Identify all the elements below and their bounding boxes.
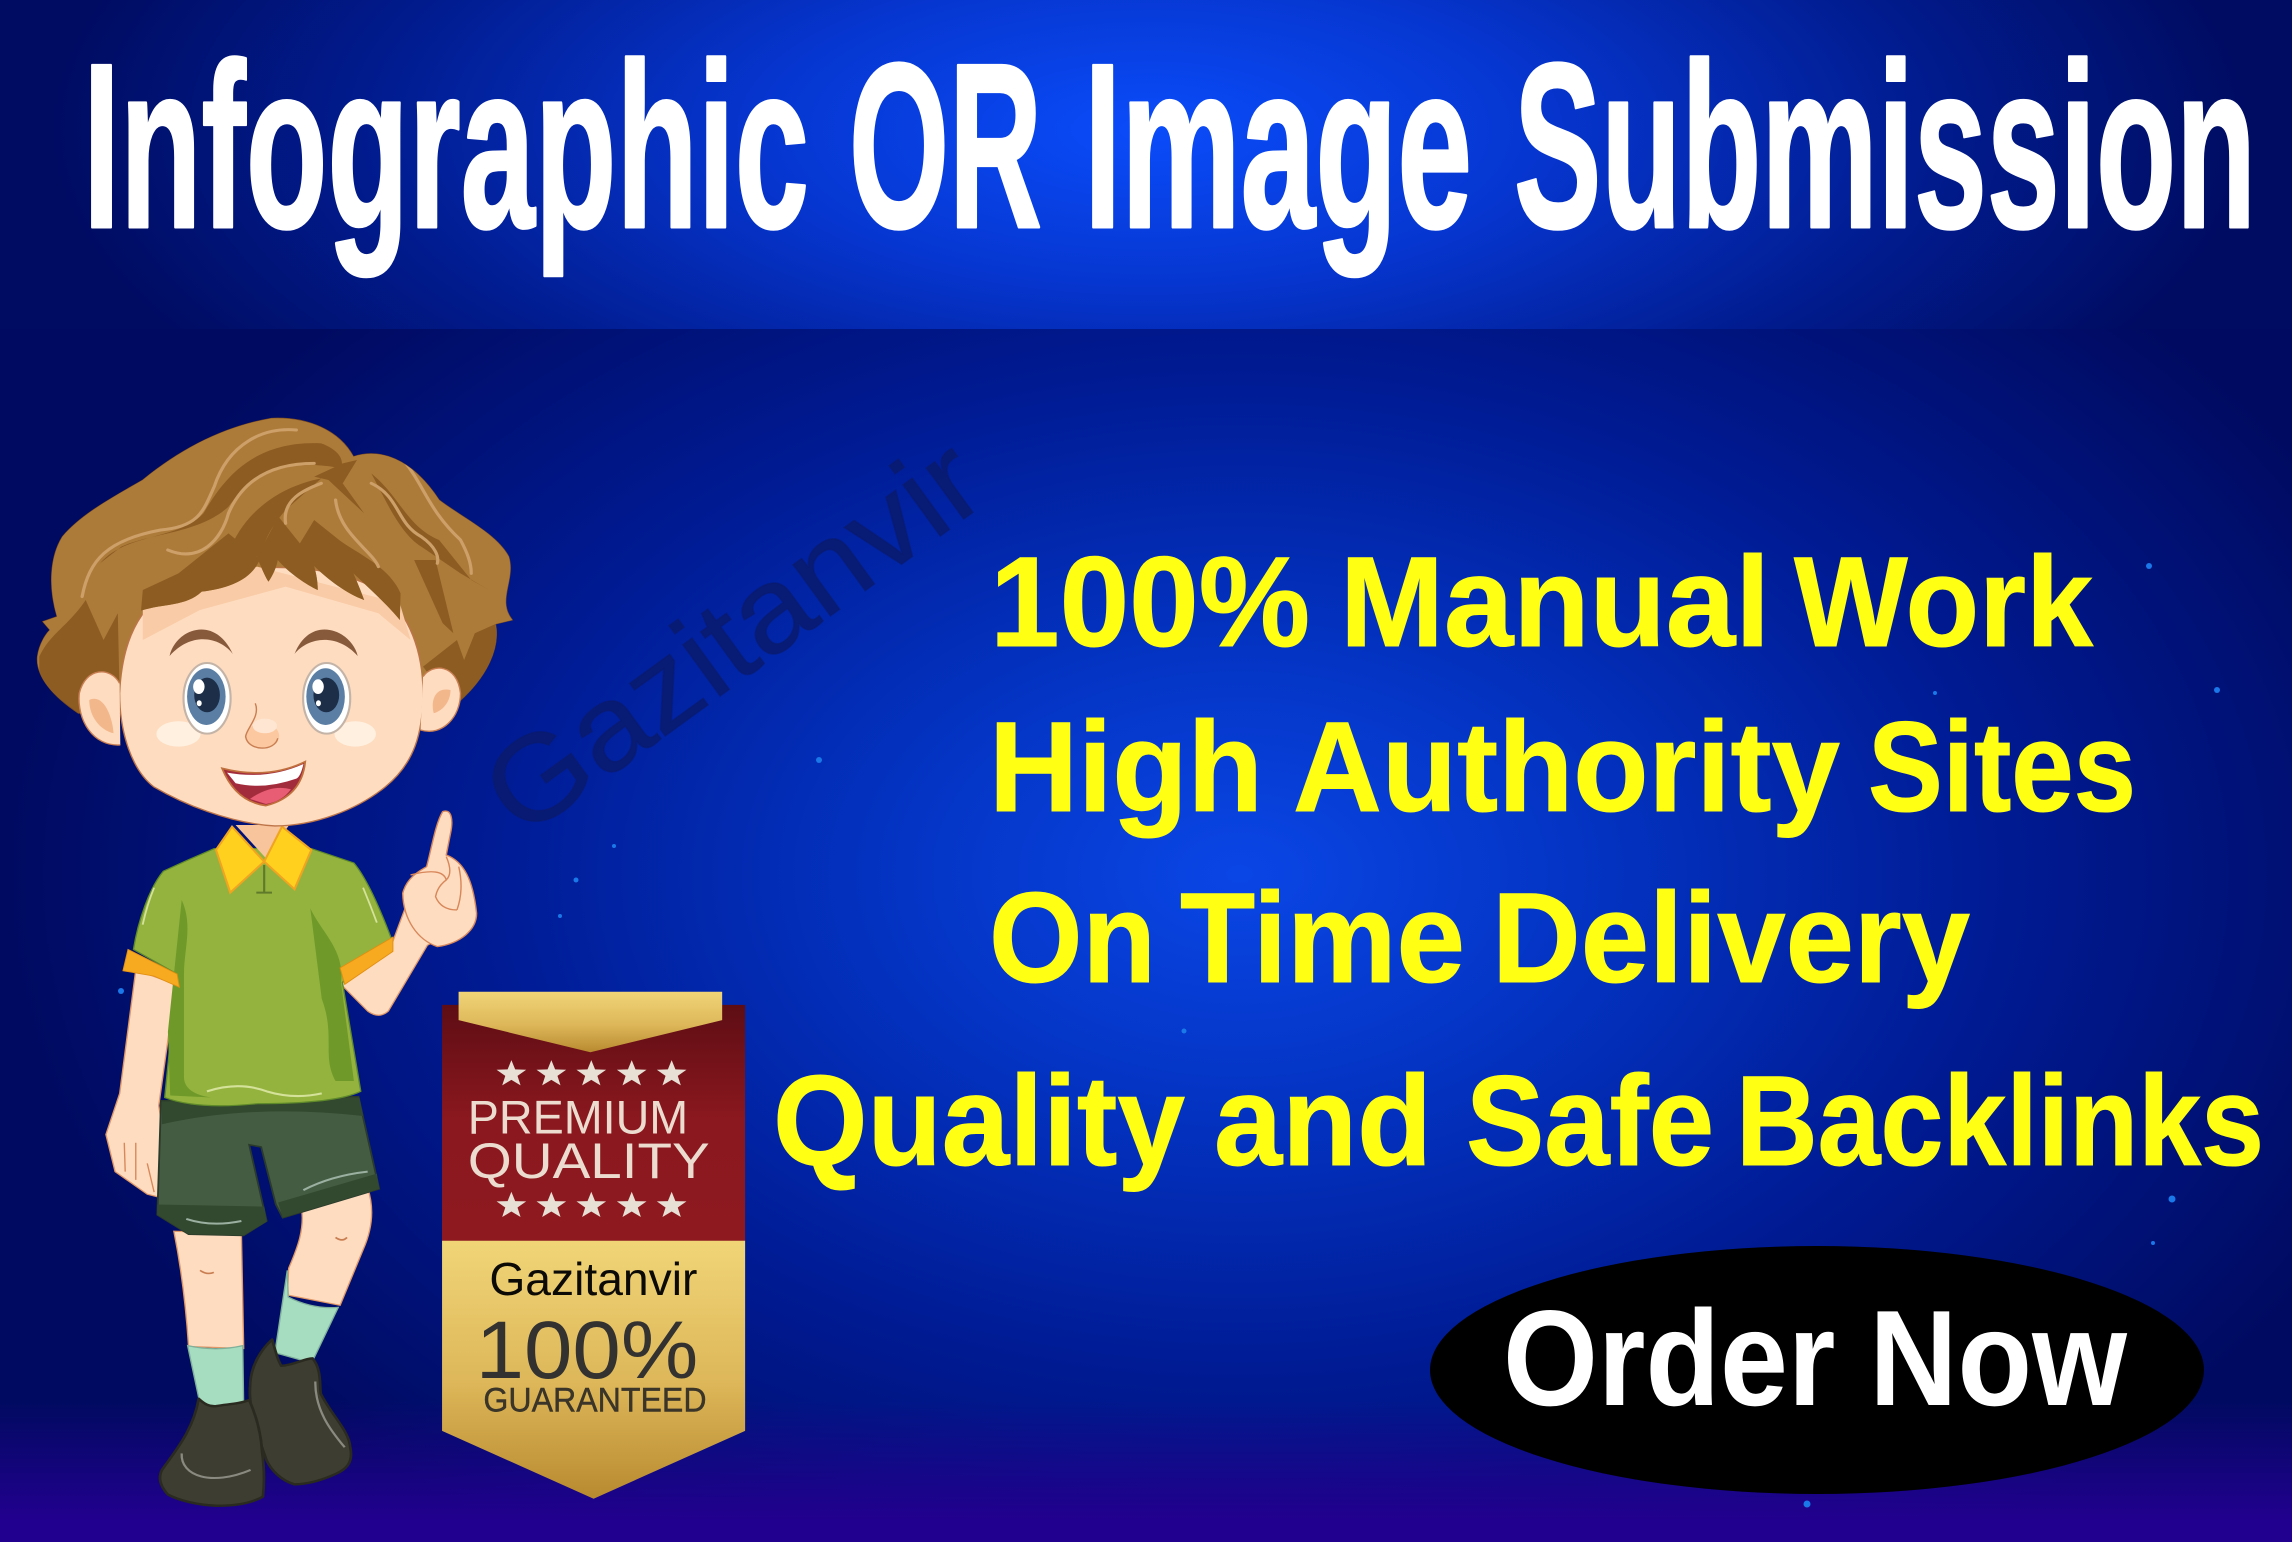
100 percent text: 100%: [476, 1305, 698, 1396]
face: [120, 567, 423, 826]
mouth: [222, 762, 305, 806]
badge gold panel: [442, 1241, 745, 1499]
eyebrows: [170, 630, 358, 656]
premium quality badge: [442, 992, 745, 1499]
feature: manual work: [990, 531, 2094, 674]
light hair strands: [82, 430, 471, 597]
boy lower body: [106, 849, 464, 1506]
feature: manual work: Work: [1794, 531, 2094, 674]
title: [83, 14, 2256, 277]
brand text: Gazitanvir: [489, 1254, 697, 1305]
head: [36, 418, 514, 827]
forehead shadow: [143, 567, 411, 640]
badge red panel: [442, 1005, 745, 1242]
hair back: [37, 418, 512, 713]
nose: [246, 703, 279, 749]
shirt: [133, 849, 392, 1106]
legs: [174, 1188, 372, 1349]
left arm: [106, 970, 176, 1197]
feature: quality backlinks: Safe: [1466, 1050, 1714, 1193]
feature: manual work: 100%: [990, 531, 1310, 674]
feature: authority sites: Authority: [1293, 696, 1840, 839]
feature: authority sites: Sites: [1868, 696, 2136, 839]
shoes: [160, 1339, 351, 1506]
left eye: [183, 663, 231, 734]
feature: authority sites: High: [989, 696, 1263, 839]
feature: quality backlinks: Quality: [773, 1050, 1185, 1193]
ears: [79, 668, 461, 745]
sleeve bands: [123, 937, 393, 987]
feature: manual work: Manual: [1340, 531, 1770, 674]
quality text: QUALITY: [468, 1133, 710, 1189]
title: OR: [849, 14, 1042, 277]
gold ribbon: [459, 992, 722, 1052]
title: Infographic: [83, 14, 809, 277]
boy character: [0, 400, 536, 1506]
feature: quality backlinks: [773, 1050, 2264, 1193]
pointing hand: [403, 811, 477, 947]
hair fringe: [37, 418, 512, 713]
stars bottom: [497, 1192, 686, 1217]
feature: quality backlinks: and: [1214, 1050, 1432, 1193]
dark hair strands: [39, 443, 500, 713]
stars top: [497, 1060, 686, 1085]
collar: [216, 825, 311, 893]
right forearm: [341, 904, 464, 1015]
sparkles: [118, 563, 2220, 1508]
socks: [188, 1270, 338, 1408]
order now button: [1430, 1246, 2204, 1494]
watermark: Gazitanvir: [459, 412, 1007, 861]
guaranteed text: GUARANTEED: [483, 1380, 707, 1419]
feature: on time delivery: Delivery: [1492, 867, 1970, 1010]
title: Image: [1084, 14, 1472, 277]
feature: on time delivery: On: [989, 867, 1156, 1010]
feature: authority sites: [989, 696, 2136, 839]
right eye: [303, 663, 350, 734]
order now button: Order Now: [1503, 1282, 2128, 1434]
premium text: PREMIUM: [468, 1090, 688, 1144]
feature list: [773, 531, 2264, 1193]
feature: on time delivery: [989, 867, 1970, 1010]
feature: on time delivery: Time: [1180, 867, 1465, 1010]
cheeks: [156, 721, 376, 747]
shorts: [157, 1097, 379, 1235]
